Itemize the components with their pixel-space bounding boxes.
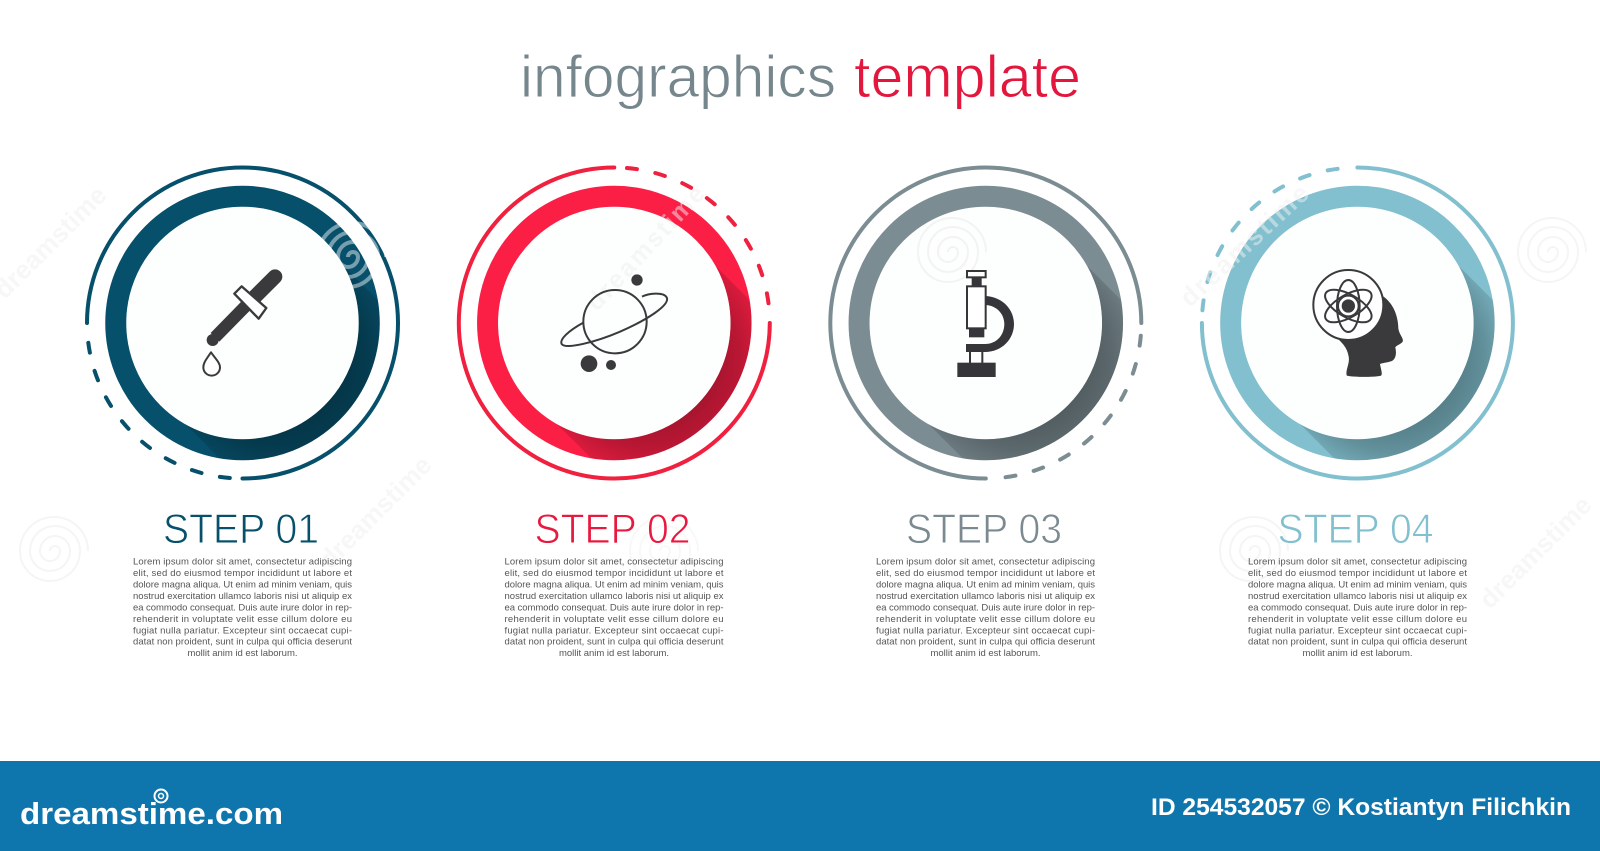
text block: step 03 <box>876 556 1095 659</box>
text block: step 04: fugiat nulla pariatur. Excepteur sint occaecat cupi- <box>1248 625 1467 636</box>
footer logo: dreamstime.com <box>20 796 283 831</box>
thick ring <box>116 196 369 450</box>
icon: planet <box>561 274 667 372</box>
text block: step 03: fugiat nulla pariatur. Excepteur sint occaecat cupi- <box>876 625 1095 636</box>
text block: step 03: datat non proident, sunt in culpa qui officia deserunt <box>876 637 1095 648</box>
panel: step 04 circle <box>1202 168 1513 478</box>
text block: step 02: dolore magna aliqua. Ut enim ad minim veniam, quis <box>504 579 724 590</box>
text block: step 02: ea commodo consequat. Duis aute irure dolor in rep- <box>504 602 724 613</box>
text block: step 04: nostrud exercitation ullamco laboris nisi ut aliquip ex <box>1248 591 1467 602</box>
title: template <box>854 44 1081 110</box>
panel: step 03 circle <box>830 168 1141 478</box>
text block: step 04: datat non proident, sunt in culpa qui officia deserunt <box>1248 637 1467 648</box>
text block: step 01: dolore magna aliqua. Ut enim ad minim veniam, quis <box>133 579 352 590</box>
text block: step 02: Lorem ipsum dolor sit amet, consectetur adipiscing <box>504 556 724 568</box>
watermark spiral in disc 3 <box>918 218 986 282</box>
text block: step 03: mollit anim id est laborum. <box>930 648 1040 659</box>
text block: step 04 <box>1248 556 1467 659</box>
text block: step 01: elit, sed do eiusmod tempor incididunt ut labore et <box>133 568 352 579</box>
thick ring <box>859 196 1113 450</box>
title <box>520 44 1081 110</box>
text block: step 04: rehenderit in voluptate velit esse cillum dolore eu <box>1248 614 1467 625</box>
footer band <box>0 761 1600 851</box>
ring shadow <box>928 266 1123 460</box>
text block: step 01: datat non proident, sunt in culpa qui officia deserunt <box>133 637 352 648</box>
heading: step 02: STEP 02 <box>534 505 690 552</box>
text block: step 02: elit, sed do eiusmod tempor incididunt ut labore et <box>504 568 724 579</box>
text block: step 04: mollit anim id est laborum. <box>1302 648 1412 659</box>
outer broken ring <box>459 168 770 478</box>
text block: step 04: dolore magna aliqua. Ut enim ad minim veniam, quis <box>1248 579 1467 590</box>
text block: step 03: rehenderit in voluptate velit esse cillum dolore eu <box>876 614 1095 625</box>
text block: step 02: rehenderit in voluptate velit esse cillum dolore eu <box>504 614 724 625</box>
icon: pipette <box>203 277 275 376</box>
text block: step 02: nostrud exercitation ullamco laboris nisi ut aliquip ex <box>504 591 724 602</box>
heading: step 04: STEP 04 <box>1278 505 1434 552</box>
watermark spiral on ring 1 <box>318 223 386 287</box>
outer broken ring <box>87 168 398 478</box>
text block: step 02: datat non proident, sunt in culpa qui officia deserunt <box>504 637 724 648</box>
text block: step 03: ea commodo consequat. Duis aute irure dolor in rep- <box>876 602 1095 613</box>
thick ring <box>1231 196 1484 450</box>
background watermarks: dreamstime <box>313 450 437 574</box>
heading: step 01: STEP 01 <box>163 505 319 552</box>
text block: step 04: Lorem ipsum dolor sit amet, consectetur adipiscing <box>1248 556 1467 568</box>
text block: step 01: Lorem ipsum dolor sit amet, consectetur adipiscing <box>133 556 352 568</box>
footer credit: ID 254532057 © Kostiantyn Filichkin <box>1151 794 1571 821</box>
ring shadow <box>186 268 380 460</box>
text block: step 01: nostrud exercitation ullamco laboris nisi ut aliquip ex <box>133 591 352 602</box>
text block: step 03: nostrud exercitation ullamco laboris nisi ut aliquip ex <box>876 591 1095 602</box>
inner disc <box>870 207 1102 439</box>
panel: step 01 circle <box>87 168 398 478</box>
watermark text on ring 4: dreamstime <box>1174 178 1315 312</box>
text block: step 04: elit, sed do eiusmod tempor incididunt ut labore et <box>1248 568 1467 579</box>
title: infographics <box>520 44 836 110</box>
text block: step 04: ea commodo consequat. Duis aute irure dolor in rep- <box>1248 602 1467 613</box>
text block: step 01: fugiat nulla pariatur. Excepteur sint occaecat cupi- <box>133 625 352 636</box>
heading: step 03: STEP 03 <box>906 505 1062 552</box>
text block: step 03: dolore magna aliqua. Ut enim ad minim veniam, quis <box>876 579 1095 590</box>
text block: step 01: mollit anim id est laborum. <box>188 648 298 659</box>
thick ring <box>488 196 741 450</box>
icon: microscope <box>957 271 1014 377</box>
text block: step 02 <box>504 556 724 659</box>
text block: step 02: fugiat nulla pariatur. Excepteur sint occaecat cupi- <box>504 625 724 636</box>
text block: step 02: mollit anim id est laborum. <box>559 648 669 659</box>
panel: step 02 circle <box>459 168 770 478</box>
inner disc <box>1241 207 1473 439</box>
text block: step 03: Lorem ipsum dolor sit amet, consectetur adipiscing <box>876 556 1095 568</box>
outer broken ring <box>830 168 1141 478</box>
ring shadow <box>1300 266 1495 460</box>
icon: head with atom <box>1313 270 1403 377</box>
text block: step 01 <box>133 556 352 659</box>
ring shadow <box>557 266 752 460</box>
inner disc <box>498 207 730 439</box>
inner disc <box>126 207 358 439</box>
text block: step 01: ea commodo consequat. Duis aute irure dolor in rep- <box>133 602 352 613</box>
watermark text on ring 2: dreamstime <box>581 180 711 316</box>
background watermarks: dreamstime <box>1473 490 1597 614</box>
text block: step 01: rehenderit in voluptate velit esse cillum dolore eu <box>133 614 352 625</box>
background watermarks <box>0 180 1597 614</box>
text block: step 03: elit, sed do eiusmod tempor incididunt ut labore et <box>876 568 1095 579</box>
outer broken ring <box>1202 168 1513 478</box>
